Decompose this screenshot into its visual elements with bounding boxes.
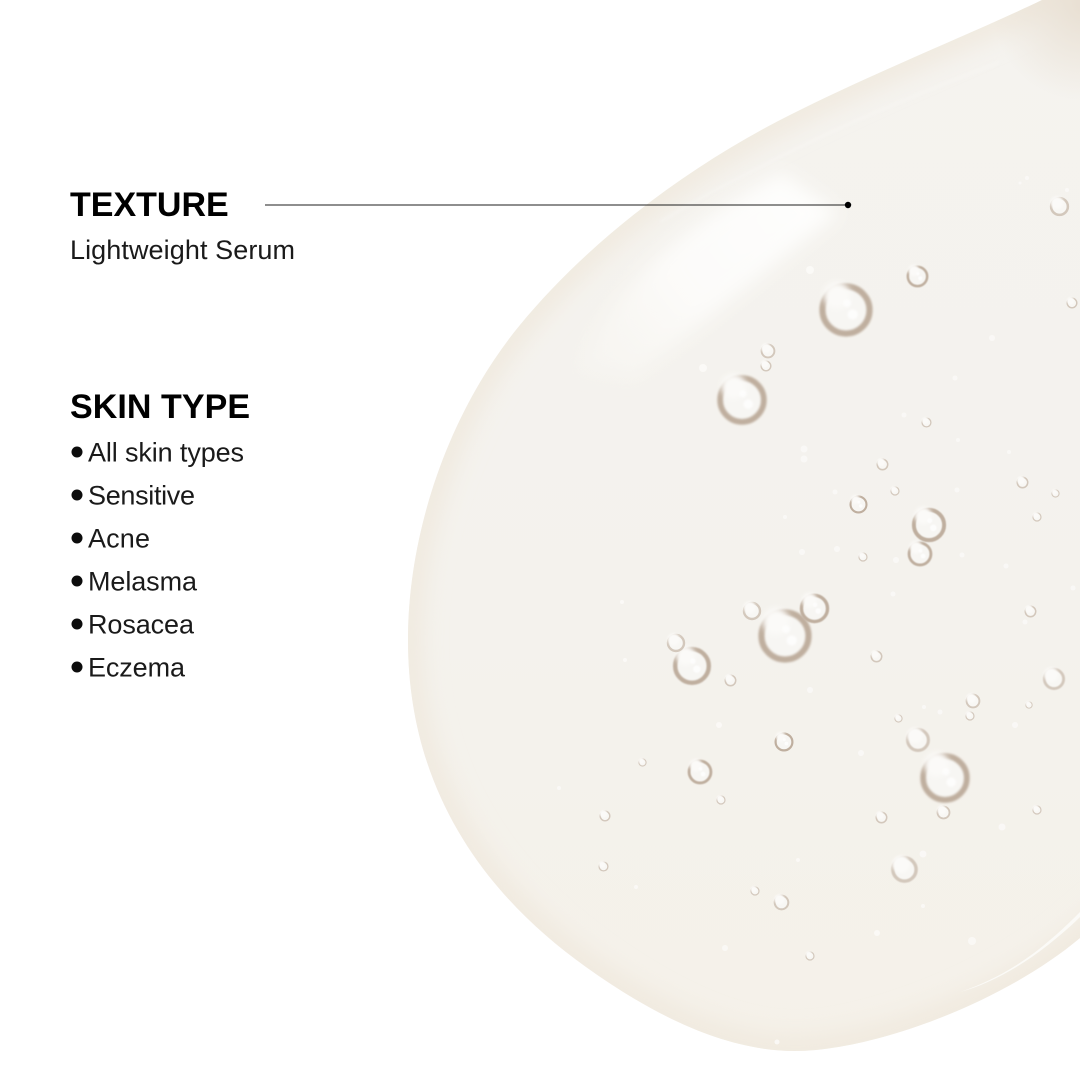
gloss highlight xyxy=(649,179,827,328)
skin type heading: SKIN TYPE xyxy=(70,388,250,426)
large ringed bubbles xyxy=(667,196,1069,882)
lower rim sheen xyxy=(960,912,1080,992)
skin type list: Melasma xyxy=(88,566,198,596)
skin type list: Eczema xyxy=(88,652,186,682)
warm neck tint xyxy=(1026,0,1080,72)
skin type list: Acne xyxy=(88,524,150,554)
bubbles xyxy=(557,176,1077,1044)
skin type list: All skin types xyxy=(88,438,244,468)
small bubbles xyxy=(599,297,1077,960)
serum swatch xyxy=(408,0,1080,1051)
skin type list xyxy=(72,438,244,682)
leader line from texture heading to swatch xyxy=(265,202,851,208)
texture description: Lightweight Serum xyxy=(70,235,295,265)
skin type list: Rosacea xyxy=(88,610,195,640)
upper edge streak xyxy=(660,62,1000,222)
texture heading: TEXTURE xyxy=(70,186,229,224)
warm edge shading xyxy=(408,0,1080,1051)
tiny droplets xyxy=(557,176,1076,1044)
skin type list: Sensitive xyxy=(88,480,195,510)
